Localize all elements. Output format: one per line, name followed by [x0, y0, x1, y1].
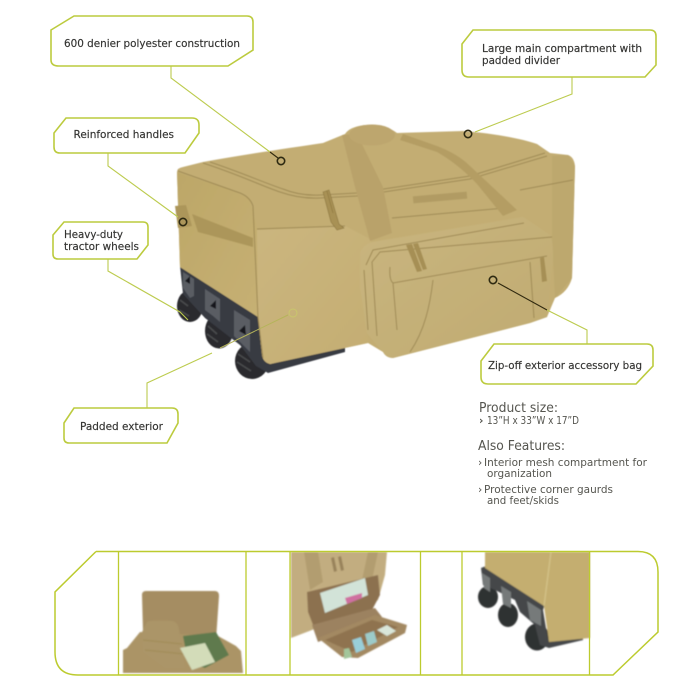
duffel bag photo — [175, 124, 575, 379]
also features list: organization — [487, 468, 552, 480]
product size: 13”H x 33”W x 17”D — [487, 415, 579, 427]
callout: handles — [54, 118, 199, 153]
also features list: Protective corner gaurds — [484, 484, 613, 496]
side handle — [175, 205, 253, 247]
leader line: main compartment — [464, 77, 572, 138]
callout: accessory bag: Zip-off exterior accessory bag — [488, 360, 642, 372]
product size: › — [479, 415, 483, 427]
left end panel — [177, 172, 258, 317]
leader line: wheels — [108, 259, 188, 320]
callout: wheels — [53, 222, 148, 259]
callout: wheels: Heavy-duty — [64, 229, 123, 241]
leader line: handles — [108, 153, 187, 226]
also features list: › — [478, 484, 482, 496]
bag silhouette — [177, 125, 575, 364]
callout: main compartment: Large main compartment with — [482, 43, 642, 55]
callout: handles: Reinforced handles — [74, 129, 174, 141]
label patch — [413, 192, 467, 203]
photo: toiletry pouch — [291, 552, 407, 659]
also features list: Also Features: — [478, 438, 565, 454]
callout: main compartment: padded divider — [482, 55, 561, 67]
wheel housing — [180, 266, 345, 373]
wheels — [177, 290, 269, 379]
callout: padded exterior — [64, 408, 178, 443]
product size — [479, 400, 579, 427]
photo: wheels close-up — [478, 552, 590, 650]
main zipper pull — [323, 190, 344, 230]
product size: Product size: — [479, 400, 558, 416]
back end shade — [552, 155, 575, 298]
callout: polyester: 600 denier polyester construction — [64, 38, 240, 50]
front panel — [257, 226, 372, 364]
also features list: › — [478, 457, 482, 469]
leader line: accessory bag — [489, 276, 587, 344]
callout: main compartment — [462, 30, 656, 77]
photo: open main compartment — [123, 591, 243, 673]
callout: accessory bag — [481, 344, 653, 384]
also features list: and feet/skids — [487, 495, 559, 507]
callout: padded exterior: Padded exterior — [80, 421, 164, 433]
carry handle — [349, 124, 395, 146]
shoulder strap — [400, 134, 517, 216]
image strip frame — [55, 552, 658, 675]
strap — [342, 134, 392, 241]
leader line: padded exterior — [147, 309, 297, 408]
accessory pouch — [360, 217, 553, 358]
callout: wheels: tractor wheels — [64, 241, 139, 253]
leader line: polyester — [171, 66, 285, 165]
also features list: Interior mesh compartment for — [484, 457, 648, 469]
callout: polyester — [51, 16, 253, 66]
also features list — [478, 438, 648, 507]
seams and zippers — [178, 153, 573, 358]
